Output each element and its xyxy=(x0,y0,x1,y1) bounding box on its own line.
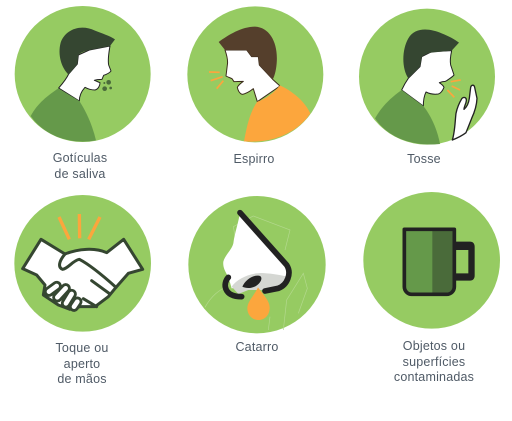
icon: fingers xyxy=(49,286,77,307)
text: Gotículas de saliva: Gotículas xyxy=(53,151,107,165)
panel: droplets of saliva xyxy=(15,6,151,181)
text: Objetos ou superfícies contaminadas: superfícies xyxy=(403,355,465,369)
icon: nose with drop xyxy=(188,196,326,333)
panel: contaminated objects or surfaces xyxy=(363,192,500,384)
text: Gotículas de saliva: de saliva xyxy=(54,167,106,181)
text: Toque ou aperto de mãos: aperto xyxy=(64,357,100,371)
text: Catarro: Catarro xyxy=(235,340,279,354)
icon: man expelling droplets xyxy=(15,6,151,142)
icon: man sneezing xyxy=(187,6,323,142)
text: Tosse: Tosse xyxy=(407,152,441,166)
icon: handshake xyxy=(14,195,151,332)
text: Objetos ou superfícies contaminadas: contaminadas xyxy=(394,370,474,384)
text: Toque ou aperto de mãos: Toque ou xyxy=(55,341,109,355)
icon: mug xyxy=(363,192,500,329)
panel: sneeze xyxy=(187,6,323,166)
panel: mucus xyxy=(188,196,326,354)
text: Objetos ou superfícies contaminadas: Objetos ou xyxy=(403,339,465,353)
icon: man coughing into hand xyxy=(359,9,495,145)
panel: touch or handshake xyxy=(14,195,151,386)
text: Toque ou aperto de mãos: de mãos xyxy=(57,372,107,386)
panel: cough xyxy=(359,9,495,166)
text: Espirro: Espirro xyxy=(234,152,274,166)
